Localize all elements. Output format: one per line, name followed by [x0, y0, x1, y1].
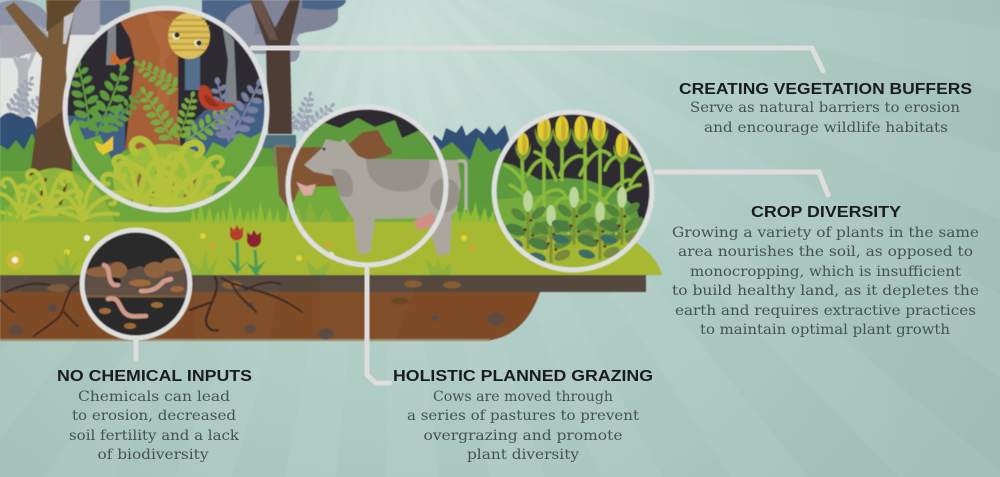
worms [104, 265, 171, 316]
illustrated landscape scene [0, 0, 662, 341]
beehive [168, 13, 210, 59]
text: crop diversity [672, 204, 979, 338]
main trunk [120, 10, 188, 151]
circle: cows grazing [275, 107, 466, 266]
grey trunks in circle [106, 25, 237, 105]
text: creating vegetation buffers: Serve as natural barriers to erosion [690, 100, 960, 116]
grass field [0, 133, 515, 222]
text: crop diversity: to maintain optimal plant growth [700, 322, 950, 338]
text: holistic planned grazing: a series of pastures to prevent [407, 408, 639, 424]
green lawn in circle [69, 118, 262, 196]
brown cow behind [275, 146, 340, 215]
yellow curled ferns at foot of tree [0, 168, 118, 222]
text: crop diversity: monocropping, which is insufficient [690, 264, 961, 280]
grey tree foliage [0, 0, 346, 118]
leafy bushes [504, 187, 646, 263]
text: creating vegetation buffers: and encourage wildlife habitats [704, 120, 948, 136]
meadow flowers [6, 225, 476, 276]
lime meadow band [0, 222, 662, 275]
text: no chemical inputs: NO CHEMICAL INPUTS [57, 368, 252, 385]
text: creating vegetation buffers [679, 81, 972, 136]
grey cow [304, 139, 466, 255]
text: no chemical inputs: to erosion, decreased [72, 408, 236, 424]
text: no chemical inputs [57, 368, 252, 463]
corn cobs [515, 116, 631, 164]
text: crop diversity: CROP DIVERSITY [751, 204, 901, 221]
text: no chemical inputs: Chemicals can lead [78, 389, 230, 405]
circle: crop diversity [494, 112, 652, 270]
text: crop diversity: to build healthy land, as it depletes the [672, 283, 979, 299]
tree roots [0, 277, 302, 336]
text: holistic planned grazing: HOLISTIC PLANNED GRAZING [393, 368, 653, 385]
circle: vegetation buffers [65, 8, 277, 216]
yellow fern bush [98, 139, 238, 216]
grey ferns behind [3, 72, 341, 139]
brown cow in circle [288, 130, 392, 210]
pale forest backdrop [0, 30, 100, 150]
text: crop diversity: earth and requires extractive practices [675, 303, 976, 319]
text: no chemical inputs: of biodiversity [98, 447, 209, 463]
text: holistic planned grazing: overgrazing and promote [424, 428, 622, 444]
soil cross-section [0, 275, 646, 341]
orange butterfly [110, 50, 131, 67]
dark blue shrubs [0, 113, 512, 165]
text: holistic planned grazing: plant diversity [467, 447, 580, 463]
red bird [198, 85, 237, 110]
blue ground foliage [65, 100, 267, 160]
leader lines [136, 48, 828, 383]
corn stalks and leaves [505, 145, 648, 235]
foreground tree [5, 0, 82, 212]
ring [65, 8, 267, 210]
text: holistic planned grazing: Cows are moved through [433, 389, 613, 405]
text: crop diversity: Growing a variety of plants in the same [672, 225, 979, 241]
yellow butterfly [94, 136, 113, 155]
text: holistic planned grazing [393, 368, 653, 463]
green ferns [70, 60, 142, 136]
text: no chemical inputs: soil fertility and a lack [69, 428, 239, 444]
text: crop diversity: area nourishes the soil, as opposed to [678, 244, 973, 260]
grass tufts [0, 202, 496, 222]
circle: earthworms in soil [82, 230, 190, 338]
back tree trunk [250, 0, 300, 134]
text: creating vegetation buffers: CREATING VEGETATION BUFFERS [679, 81, 972, 98]
